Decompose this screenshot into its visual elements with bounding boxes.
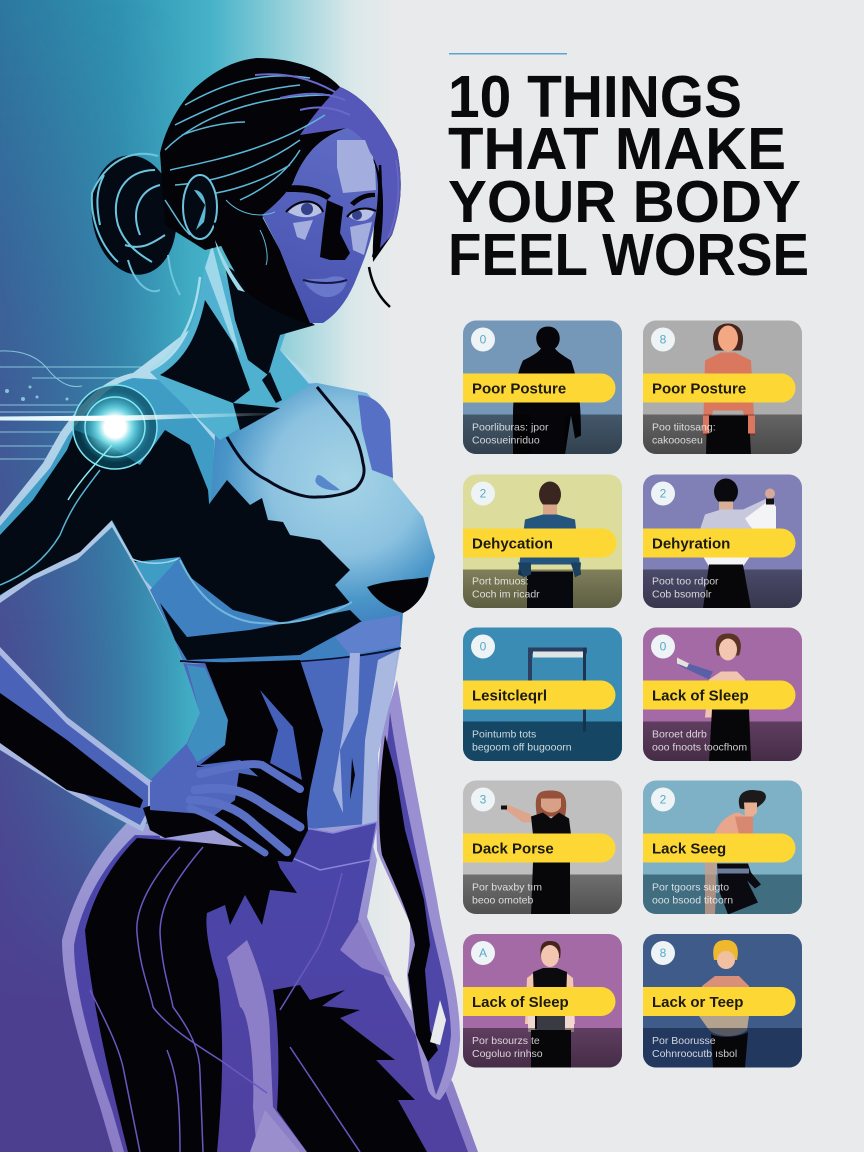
neck — [150, 245, 315, 440]
decorative light lines — [0, 351, 145, 459]
card 2: Poor Posture — [643, 320, 802, 454]
card 2: Poor Posture: cakoooseu — [652, 434, 703, 446]
card 10: Lack or Teep: Por Boorusse — [652, 1035, 716, 1047]
card 8: Lack Seeg: Por tgoors sugto — [652, 882, 729, 894]
card 7: Dack Porse: Dack Porse — [472, 840, 554, 858]
card 9: Lack of Sleep — [463, 934, 622, 1068]
title: 10 THINGS — [448, 64, 742, 130]
card 7: Dack Porse: 3 — [480, 792, 487, 806]
forearm — [0, 647, 240, 838]
card 10: Lack or Teep: 8 — [660, 946, 667, 960]
card 4: Dehyration: Cob bsomolr — [652, 588, 712, 600]
card 3: Dehycation: Dehycation — [472, 536, 553, 552]
card 3: Dehycation: 2 — [480, 486, 487, 500]
background gradient — [0, 0, 370, 1152]
card 2: Poor Posture: 8 — [660, 332, 667, 346]
hand on hip — [150, 747, 308, 862]
card 5: Lesitcleqrl: 0 — [480, 640, 487, 654]
face — [262, 128, 378, 323]
card 10: Lack or Teep: Lack or Teep — [652, 994, 743, 1011]
card 1: Poor Posture: Poor Posture — [472, 380, 566, 398]
card 10: Lack or Teep: Cohnroocutb ısbol — [652, 1048, 737, 1060]
torso silhouette — [0, 310, 435, 850]
card 6: Lack of Sleep: ooo fnoots toocfhom — [652, 742, 747, 754]
jaw shadow — [213, 213, 313, 325]
head — [84, 58, 401, 325]
title: YOUR BODY — [448, 169, 801, 235]
ear — [183, 175, 217, 239]
card 8: Lack Seeg: 2 — [660, 792, 667, 806]
card 1: Poor Posture: 0 — [480, 332, 487, 346]
card 2: Poor Posture: Poor Posture — [652, 380, 746, 398]
card 8: Lack Seeg: Lack Seeg — [652, 840, 726, 858]
title — [448, 64, 809, 288]
card 10: Lack or Teep — [643, 934, 802, 1068]
title: FEEL WORSE — [448, 222, 809, 288]
card 4: Dehyration: Dehyration — [652, 536, 730, 552]
woman figure — [0, 58, 478, 1152]
right arm — [376, 680, 460, 1100]
lips — [303, 276, 347, 297]
card 5: Lesitcleqrl: begoom off bugooorn — [472, 742, 572, 754]
sports bra — [150, 383, 435, 664]
card 4: Dehyration: 2 — [660, 486, 667, 500]
card 5: Lesitcleqrl — [463, 628, 622, 762]
shoulder glow — [0, 385, 285, 500]
card 6: Lack of Sleep — [643, 628, 802, 762]
card 9: Lack of Sleep: Lack of Sleep — [472, 994, 569, 1011]
card 1: Poor Posture: Coosueinriduo — [472, 434, 540, 446]
hair mass — [160, 58, 401, 262]
nose shadow — [320, 200, 350, 260]
upper arm and shoulder — [0, 378, 240, 640]
card 9: Lack of Sleep: Cogoluo rinhso — [472, 1048, 543, 1060]
card 1: Poor Posture — [463, 320, 622, 454]
card 3: Dehycation: Port bmuos: — [472, 576, 529, 588]
card 7: Dack Porse: Por bvaxby tım — [472, 882, 542, 894]
card 4: Dehyration: Poot too rdpor — [652, 576, 719, 588]
hair strands — [165, 76, 330, 235]
card 9: Lack of Sleep: A — [479, 946, 487, 960]
card 4: Dehyration — [643, 474, 802, 608]
accent line — [449, 53, 567, 54]
hair bun — [84, 150, 184, 295]
card 8: Lack Seeg: ooo bsood titoorn — [652, 894, 733, 906]
card 3: Dehycation — [463, 474, 622, 608]
card 2: Poor Posture: Poo tiitosang: — [652, 422, 716, 434]
eyes and brows — [285, 185, 376, 221]
card 8: Lack Seeg — [643, 780, 802, 914]
abdomen — [150, 650, 398, 830]
card 6: Lack of Sleep: 0 — [660, 640, 667, 654]
card 7: Dack Porse — [463, 780, 622, 914]
card 7: Dack Porse: beoo omoteb — [472, 894, 533, 906]
card 5: Lesitcleqrl: Pointumb tots — [472, 728, 536, 740]
card 1: Poor Posture: Poorliburas: jpor — [472, 422, 549, 434]
card 3: Dehycation: Coch im ricadr — [472, 588, 540, 600]
waistband — [267, 822, 377, 870]
legs — [62, 823, 478, 1152]
face highlights — [293, 140, 376, 255]
card 6: Lack of Sleep: Lack of Sleep — [652, 688, 749, 704]
title: THAT MAKE — [448, 116, 786, 182]
card 9: Lack of Sleep: Por bsourzs te — [472, 1035, 540, 1047]
card 5: Lesitcleqrl: Lesitcleqrl — [472, 688, 547, 704]
card 6: Lack of Sleep: Boroet ddrb — [652, 728, 707, 740]
